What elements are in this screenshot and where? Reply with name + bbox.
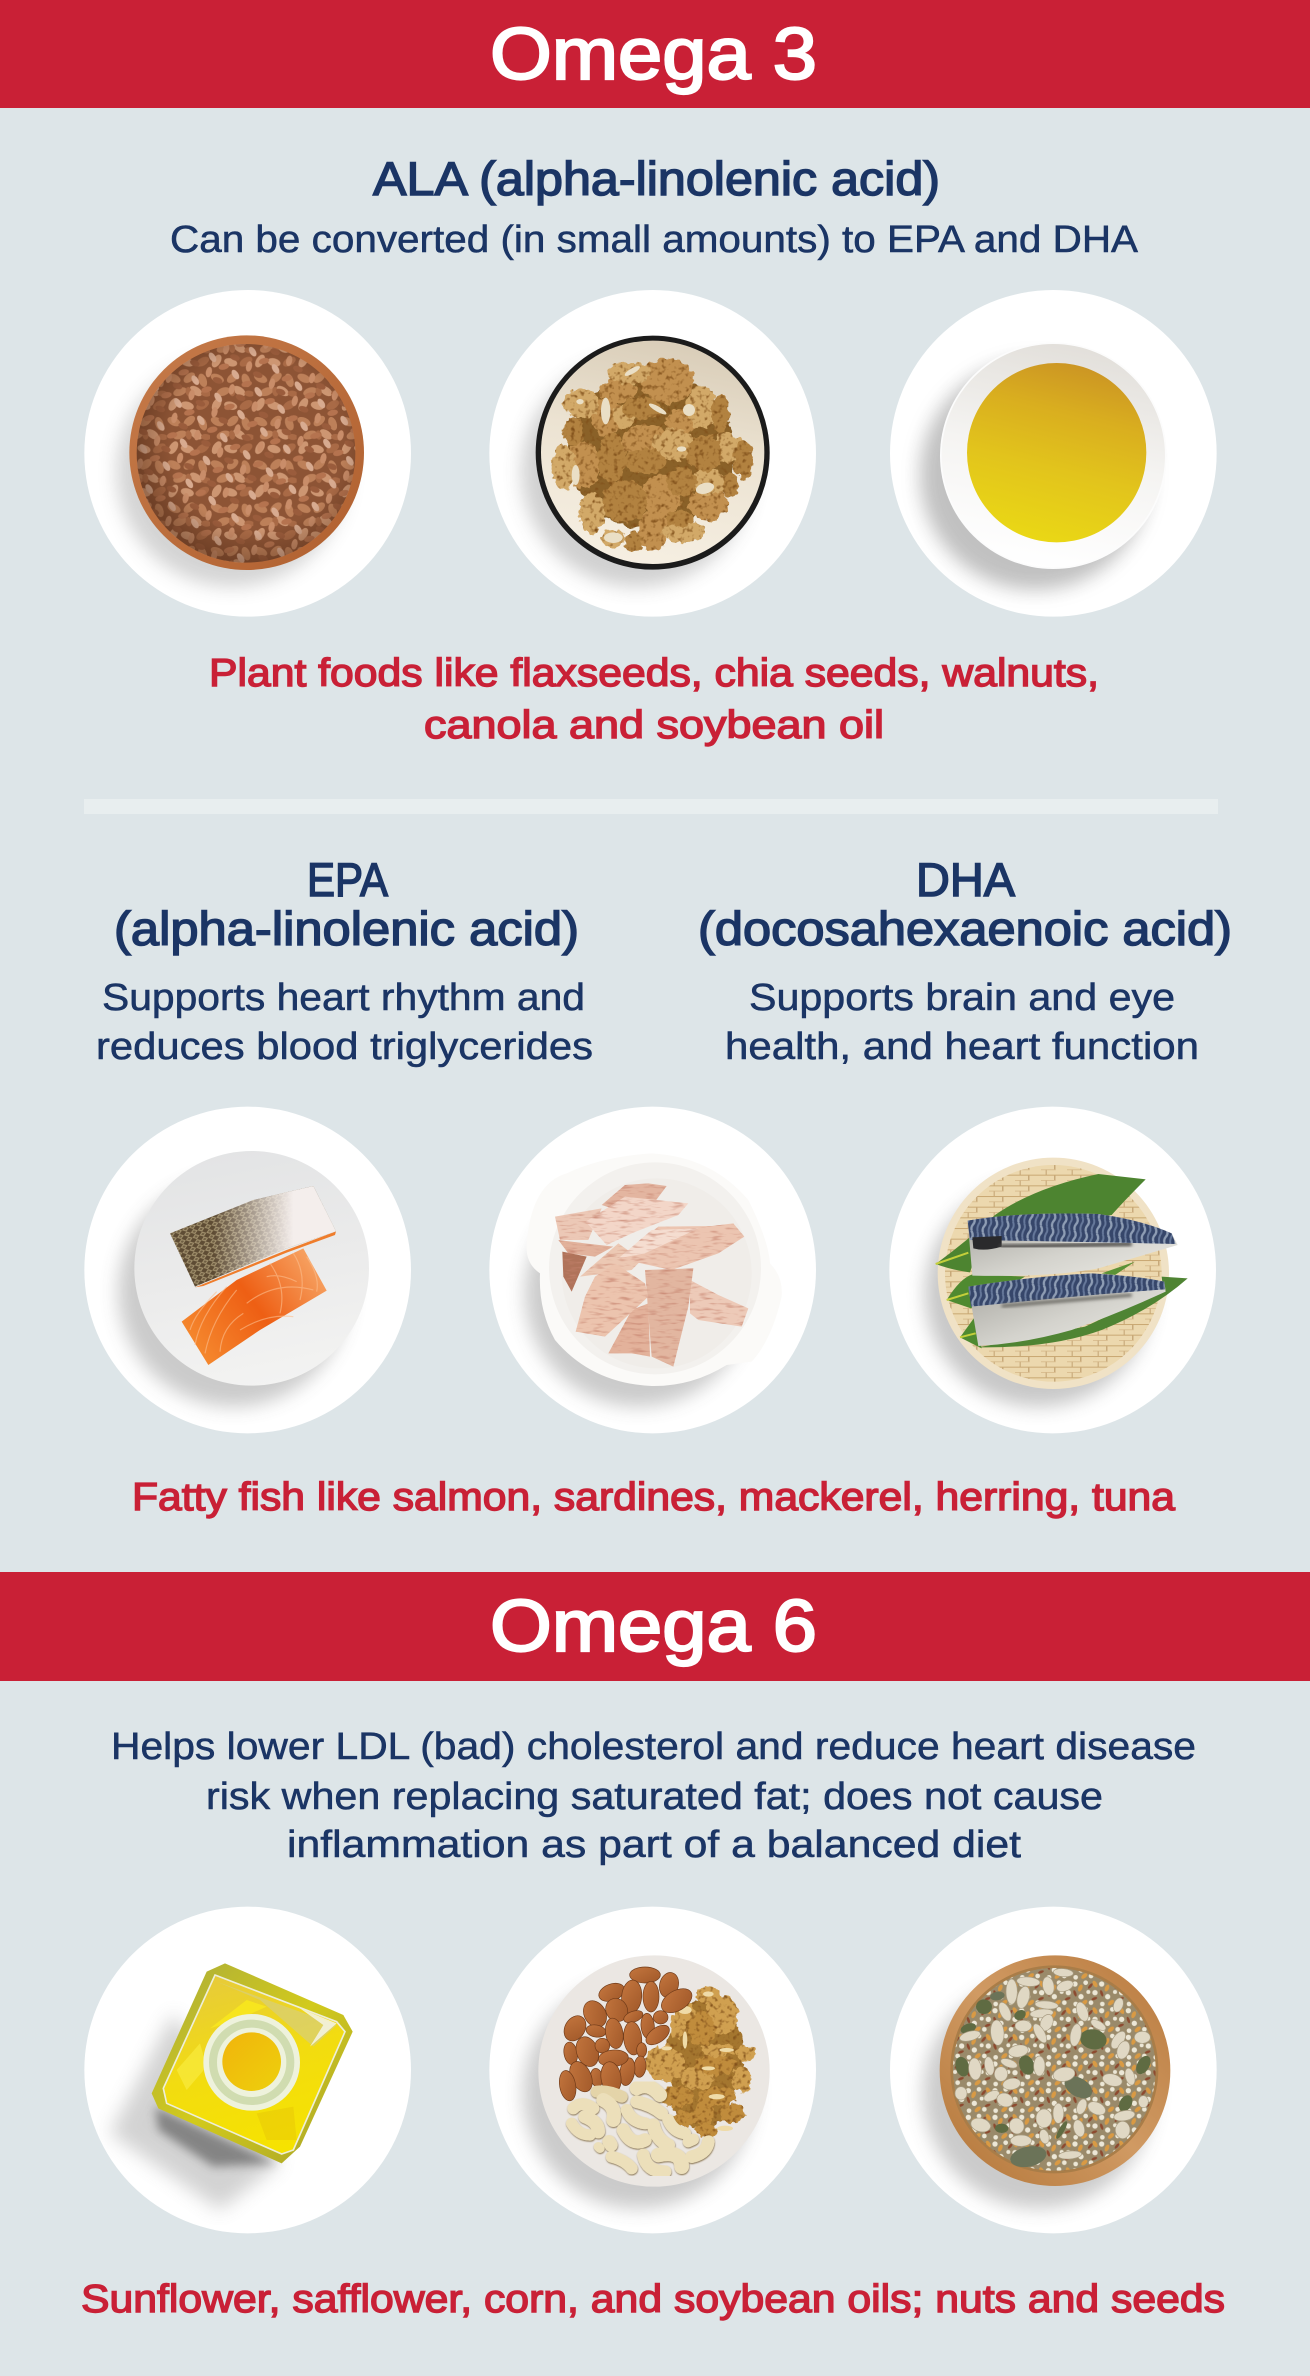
heading: EPA: EPA: [307, 853, 389, 906]
heading: DHA: [698, 853, 1232, 955]
icon: mackerel on bamboo tray: [889, 1107, 1216, 1433]
text: Omega 6 description: Helps lower LDL (bad) cholesterol and reduce heart disease: [111, 1726, 1196, 1768]
icon: tuna dish: [489, 1107, 816, 1433]
text: DHA description: health, and heart function: [725, 1026, 1199, 1068]
heading: DHA: DHA: [916, 853, 1016, 906]
walnuts: [647, 1988, 755, 2136]
text: fish food sources: Fatty fish like salmon, sardines, mackerel, herring, tuna: [132, 1476, 1175, 1519]
icon: flaxseed bowl: [84, 290, 411, 617]
heading: ALA: ALA (alpha-linolenic acid): [373, 152, 940, 205]
text: Omega 6 description: [111, 1726, 1196, 1866]
text: ALA food sources: Plant foods like flaxseeds, chia seeds, walnuts,: [209, 652, 1099, 695]
divider: [84, 799, 1218, 814]
text: ALA food sources: [209, 652, 1099, 747]
text: EPA description: reduces blood triglycerides: [96, 1026, 593, 1068]
heading: Omega 3: Omega 3: [490, 14, 817, 95]
icon: seed mix bowl: [890, 1907, 1217, 2233]
heading: EPA: (alpha-linolenic acid): [114, 902, 579, 955]
text: Omega 6 description: risk when replacing saturated fat; does not cause: [206, 1776, 1103, 1818]
icon: salmon plate: [84, 1107, 411, 1433]
upper fish fillet: [968, 1214, 1178, 1276]
text: Omega 6 description: inflammation as part of a balanced diet: [287, 1824, 1021, 1866]
green leaves: [936, 1174, 1188, 1348]
pumpkin seeds: [953, 1990, 1154, 2170]
sunflower seeds: [955, 1968, 1150, 2160]
text: EPA description: Supports heart rhythm and: [102, 977, 585, 1019]
text: ALA description: Can be converted (in small amounts) to EPA and DHA: [170, 219, 1139, 261]
text: ALA food sources: canola and soybean oil: [424, 704, 884, 747]
icon: mixed nuts bowl: [489, 1907, 816, 2233]
lower fish fillet: [968, 1273, 1166, 1346]
text: EPA description: [96, 977, 593, 1068]
text: DHA description: [725, 977, 1199, 1068]
icon: walnut bowl: [489, 290, 816, 617]
text: DHA description: Supports brain and eye: [749, 977, 1175, 1019]
section: Omega 6 header band: [0, 1572, 1310, 1681]
icon: oil bottle: [84, 1907, 411, 2233]
almonds: [557, 1967, 696, 2102]
heading: Omega 6: Omega 6: [490, 1586, 817, 1667]
heading: DHA: (docosahexaenoic acid): [698, 902, 1232, 955]
text: Omega 6 food sources: Sunflower, safflower, corn, and soybean oils; nuts and seeds: [81, 2278, 1225, 2321]
icon: oil bowl: [890, 290, 1217, 617]
heading: EPA: [114, 853, 579, 955]
cashews: [572, 2086, 708, 2172]
section: Omega 3 header band: [0, 0, 1310, 108]
